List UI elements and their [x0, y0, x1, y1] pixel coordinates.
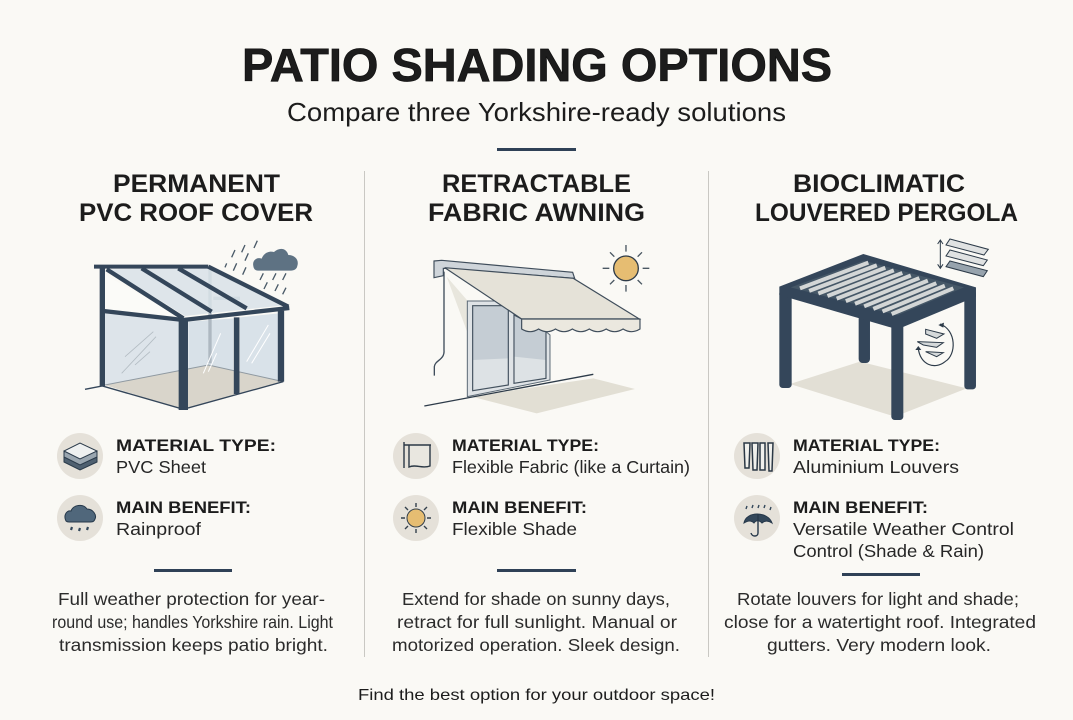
description: PVC roof: round use; handles Yorkshire rain. Light	[52, 612, 333, 632]
description: fabric awning: retract for full sunlight. Manual or	[397, 612, 677, 632]
heading: fabric awning: FABRIC AWNING	[428, 199, 645, 227]
main benefit text: Versatile Weather Control	[793, 519, 1014, 539]
illustration: PVC roof structure	[85, 241, 298, 410]
panel: louvered pergola	[724, 170, 1036, 655]
illustration: awning	[424, 245, 649, 413]
heading: PVC roof cover: PVC ROOF COVER	[79, 199, 313, 227]
material type text: MATERIAL TYPE:	[793, 436, 940, 455]
illustration: pergola	[779, 239, 988, 420]
icon: sun badge	[393, 495, 439, 541]
heading: fabric awning: RETRACTABLE	[442, 170, 631, 198]
icon: material layers	[57, 433, 103, 479]
description: fabric awning: motorized operation. Sleek design.	[392, 635, 680, 655]
main benefit text: Control (Shade & Rain)	[793, 541, 984, 561]
title: PATIO SHADING OPTIONS	[242, 39, 832, 91]
description: pergola: Rotate louvers for light and shade;	[737, 589, 1019, 609]
material type text: PVC Sheet	[116, 457, 206, 477]
footer: Find the best option for your outdoor space!	[358, 687, 715, 704]
main benefit text: MAIN BENEFIT:	[116, 498, 251, 517]
icon: umbrella	[734, 495, 780, 541]
description: PVC roof: transmission keeps patio bright.	[59, 635, 328, 655]
panel: fabric awning	[392, 170, 690, 655]
icon: rotating louvers	[915, 323, 953, 366]
icon: rain cloud badge	[57, 495, 103, 541]
material type text: MATERIAL TYPE:	[116, 436, 276, 455]
heading: louvered pergola: LOUVERED PERGOLA	[755, 199, 1018, 227]
main benefit text: MAIN BENEFIT:	[793, 498, 928, 517]
heading: PVC roof cover: PERMANENT	[113, 170, 280, 198]
main benefit text: Rainproof	[116, 519, 201, 539]
heading: louvered pergola: BIOCLIMATIC	[793, 170, 965, 198]
main benefit text: MAIN BENEFIT:	[452, 498, 587, 517]
subtitle: Compare three Yorkshire-ready solutions	[287, 97, 786, 127]
description: pergola: close for a watertight roof. Integrated	[724, 612, 1036, 632]
material type text: Aluminium Louvers	[793, 457, 959, 477]
description: pergola: gutters. Very modern look.	[767, 635, 991, 655]
icon: stacked louvers	[938, 239, 988, 277]
icon: louver panels	[734, 433, 780, 479]
icon: rain cloud	[225, 241, 298, 294]
material type text: MATERIAL TYPE:	[452, 436, 599, 455]
icon: sun	[603, 245, 649, 292]
panel: PVC roof cover	[52, 170, 333, 655]
main benefit text: Flexible Shade	[452, 519, 577, 539]
icon: fabric	[393, 433, 439, 479]
material type text: Flexible Fabric (like a Curtain)	[452, 457, 690, 477]
description: fabric awning: Extend for shade on sunny days,	[402, 589, 670, 609]
description: PVC roof: Full weather protection for year-	[58, 589, 325, 609]
